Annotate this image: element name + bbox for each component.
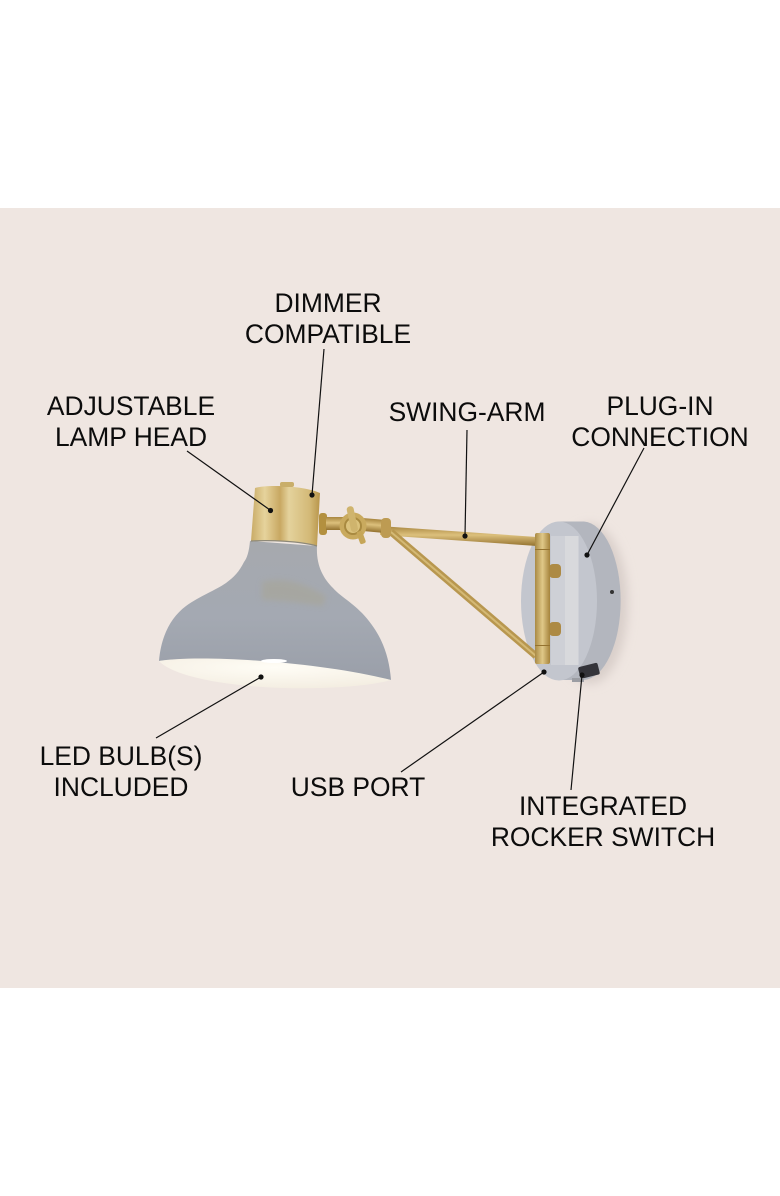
wall studs bbox=[549, 564, 561, 636]
label: usb port bbox=[291, 669, 547, 802]
label: dimmer compatible bbox=[245, 288, 411, 498]
label: plug-in connection: PLUG-IN bbox=[606, 391, 714, 421]
wall lamp illustration bbox=[159, 482, 628, 688]
label: adjustable lamp head: LAMP HEAD bbox=[55, 422, 207, 452]
wall plate bbox=[521, 522, 628, 684]
label: swing-arm: SWING-ARM bbox=[389, 397, 545, 427]
label: adjustable lamp head bbox=[47, 391, 273, 513]
swing arm bbox=[380, 526, 550, 664]
label: adjustable lamp head: ADJUSTABLE bbox=[47, 391, 215, 421]
label: plug-in connection: CONNECTION bbox=[571, 422, 749, 452]
label: dimmer compatible: COMPATIBLE bbox=[245, 319, 411, 349]
background panel bbox=[0, 208, 780, 988]
label: led bulbs included: LED BULB(S) bbox=[40, 741, 202, 771]
label: integrated rocker switch: ROCKER SWITCH bbox=[491, 822, 715, 852]
knuckle joint bbox=[319, 506, 391, 545]
label: plug-in connection bbox=[571, 391, 749, 558]
label: integrated rocker switch: INTEGRATED bbox=[519, 791, 687, 821]
label: integrated rocker switch bbox=[491, 672, 715, 852]
label: dimmer compatible: DIMMER bbox=[274, 288, 382, 318]
lamp shade bbox=[159, 541, 391, 688]
label: led bulbs included: INCLUDED bbox=[54, 772, 188, 802]
label: swing-arm bbox=[389, 397, 545, 539]
label: led bulbs included bbox=[40, 674, 264, 802]
brass cylinder bbox=[251, 482, 320, 546]
label: usb port: USB PORT bbox=[291, 772, 425, 802]
